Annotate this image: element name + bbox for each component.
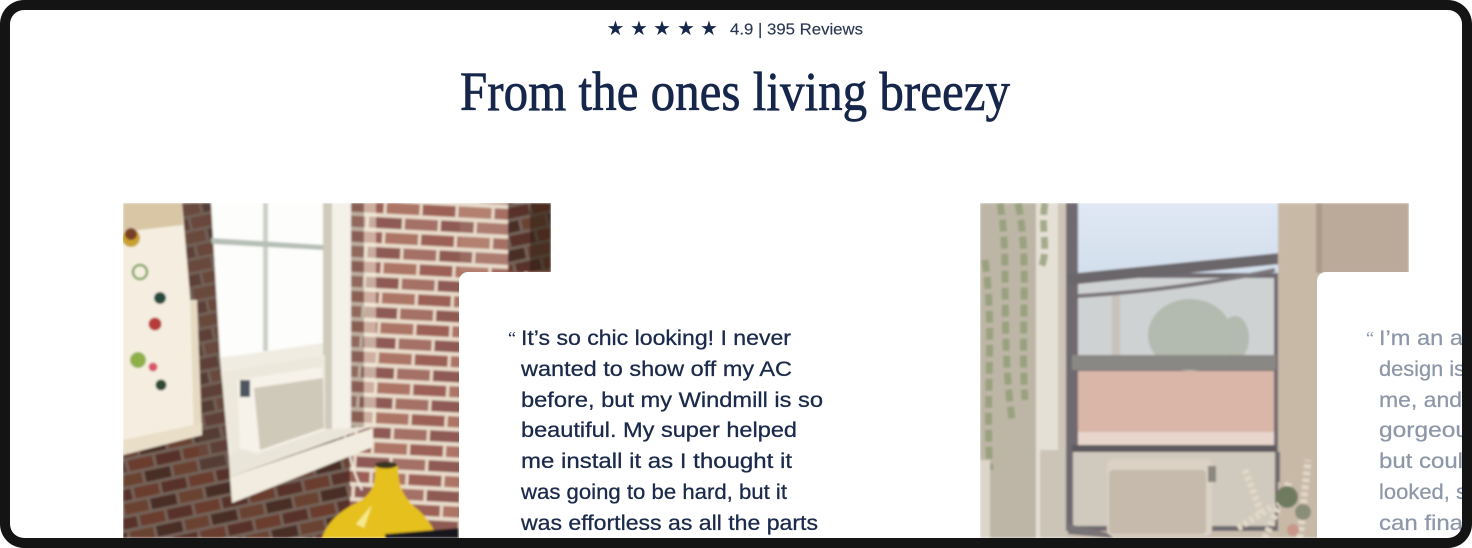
rating text: 4.9 | 395 Reviews <box>730 22 863 38</box>
testimonial text: me install it as I thought it <box>521 449 792 473</box>
quote mark: “ <box>1366 328 1374 348</box>
quote mark: “ <box>508 328 516 348</box>
testimonial card 1 <box>459 272 879 548</box>
star icons: ★ <box>677 16 695 40</box>
testimonial text: gorgeou <box>1379 418 1469 442</box>
testimonial card 2, faded and cut off <box>1317 272 1472 548</box>
testimonial text: I’m an a <box>1379 326 1463 350</box>
testimonial text: It’s so chic looking! I never <box>521 326 791 350</box>
testimonial text: before, but my Windmill is so <box>521 388 823 412</box>
star icons: ★ <box>607 16 624 40</box>
testimonial text: was going to be hard, but it <box>520 480 787 504</box>
photo: window with AC, faded <box>980 203 1409 538</box>
star icons: ★ <box>700 16 718 40</box>
testimonial text: design is <box>1379 357 1465 381</box>
testimonial text: me, and <box>1379 388 1462 412</box>
testimonial text: was effortless as all the parts <box>520 511 818 535</box>
testimonial text <box>1379 326 1469 535</box>
photo: brick wall room with window AC and yellow vase <box>122 203 551 538</box>
testimonial text: wanted to show off my AC <box>520 357 792 381</box>
star icons: ★ <box>653 16 671 40</box>
testimonial text: but coul <box>1379 449 1463 473</box>
rating row <box>607 16 863 40</box>
testimonial text <box>520 326 823 535</box>
title: From the ones living breezy <box>460 61 1010 122</box>
star icons <box>607 16 718 40</box>
testimonial text: beautiful. My super helped <box>521 418 797 442</box>
testimonial text: can fina <box>1379 511 1463 535</box>
testimonial text: looked, s <box>1379 480 1467 504</box>
star icons: ★ <box>630 16 648 40</box>
